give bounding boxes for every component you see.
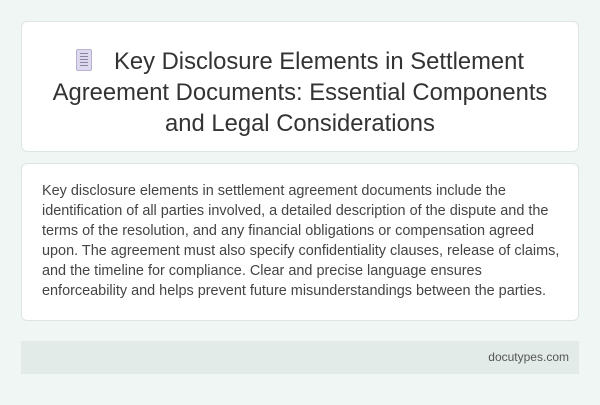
footer text: docutypes.com [488,350,569,364]
panel: description [21,163,579,321]
text block: identification of all parties involved, a detailed description of the dispute and the [42,203,548,219]
text block: terms of the resolution, and any financial obligations or compensation agreed [42,223,534,239]
title [52,48,547,137]
text block: and the timeline for compliance. Clear and precise language ensures [42,263,482,279]
title: Key Disclosure Elements in Settlement [114,48,524,75]
title: Agreement Documents: Essential Components [53,79,547,106]
footer [21,341,579,374]
text block: Key disclosure elements in settlement agreement documents include the [42,183,506,199]
text block: upon. The agreement must also specify confidentiality clauses, release of claims, [42,243,559,259]
icon: document [76,49,92,71]
title: and Legal Considerations [165,110,435,137]
text block: enforceability and helps prevent future misunderstandings between the parties. [42,283,546,299]
text block [42,183,559,299]
panel: title [21,21,579,152]
